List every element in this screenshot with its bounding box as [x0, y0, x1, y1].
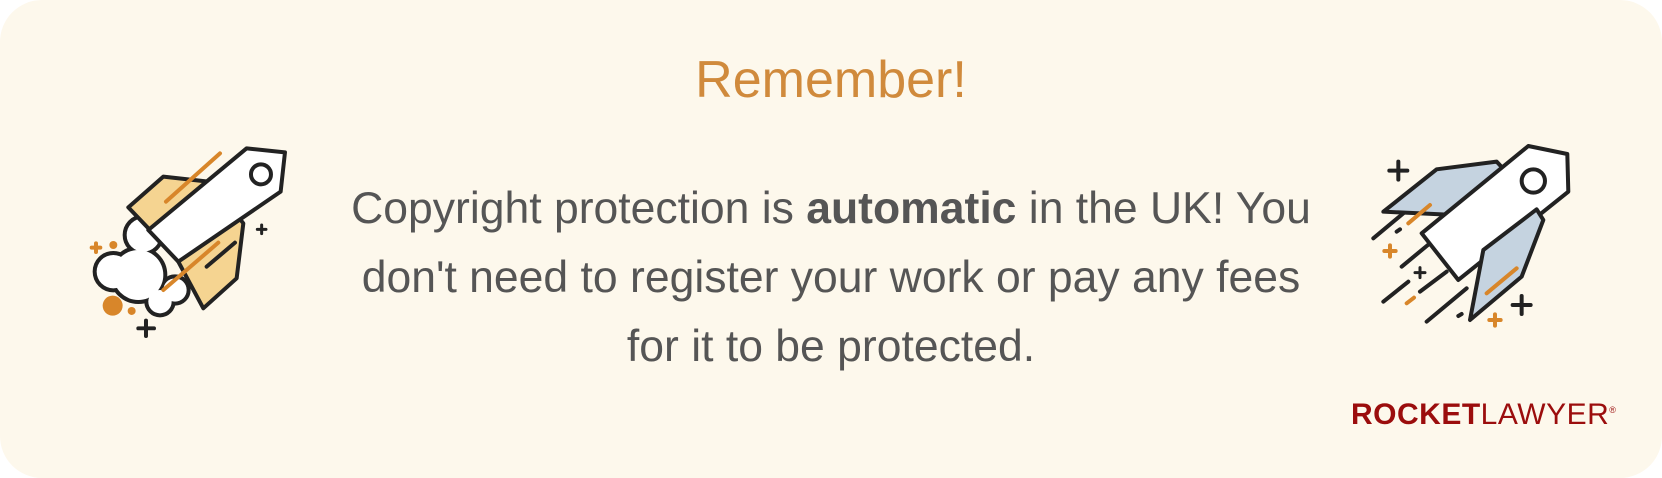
cloud — [97, 218, 187, 313]
body text — [351, 184, 1311, 371]
logo: ROCKETLAWYER® — [1351, 398, 1616, 431]
icon: right rocket — [1373, 146, 1568, 326]
body text: Copyright protection is automatic in the UK! You — [351, 184, 1311, 233]
icon: left rocket — [92, 148, 285, 336]
body text: for it to be protected. — [627, 322, 1035, 371]
title: Remember! — [695, 51, 967, 109]
body text: don't need to register your work or pay any fees — [362, 253, 1300, 302]
